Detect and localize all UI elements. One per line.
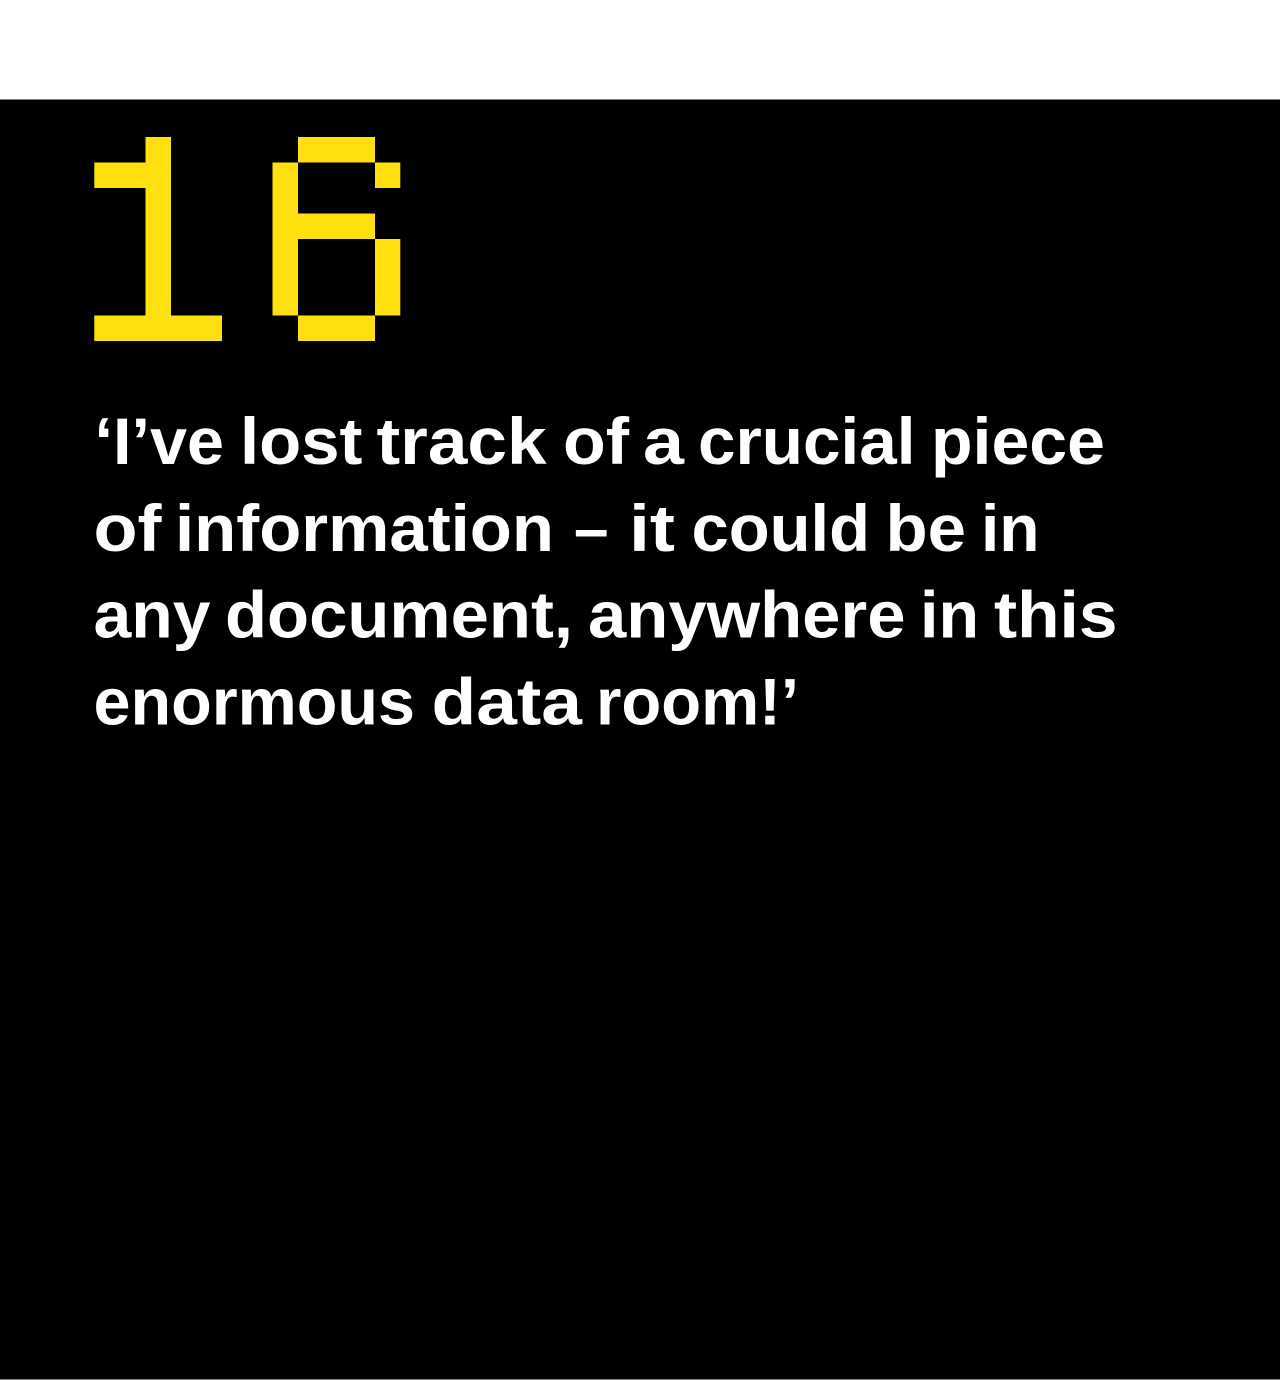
quote line 3: any xyxy=(94,578,211,652)
quote line 2: could xyxy=(692,491,870,565)
quote line 1: a xyxy=(643,404,685,478)
pixel number 16 xyxy=(94,137,400,341)
pixel digit 6 xyxy=(272,137,400,341)
quote line 2: information xyxy=(175,491,554,565)
quote line 1: track xyxy=(376,404,547,478)
quote line 2: it xyxy=(629,491,675,565)
pixel digit 1 xyxy=(94,137,222,341)
quote line 1 xyxy=(94,404,1105,478)
quote line 4 xyxy=(94,664,799,738)
quote text xyxy=(94,404,1118,738)
quote line 3: anywhere xyxy=(588,578,906,652)
quote line 3 xyxy=(94,578,1118,652)
quote line 4: data xyxy=(432,664,583,738)
quote line 2: of xyxy=(94,491,163,565)
quote line 1: lost xyxy=(240,404,363,478)
quote line 2: in xyxy=(981,491,1040,565)
quote line 4: room!’ xyxy=(596,664,799,738)
quote line 2: – xyxy=(574,491,608,565)
quote line 4: enormous xyxy=(94,664,415,738)
quote line 1: piece xyxy=(931,404,1105,478)
quote line 2: be xyxy=(886,491,966,565)
quote line 1: ‘I’ve xyxy=(94,404,224,478)
quote line 1: crucial xyxy=(698,404,916,478)
quote line 3: document, xyxy=(225,578,573,652)
quote line 3: in xyxy=(920,578,979,652)
quote line 3: this xyxy=(994,578,1118,652)
quote line 1: of xyxy=(563,404,630,478)
quote line 2 xyxy=(94,491,1040,565)
